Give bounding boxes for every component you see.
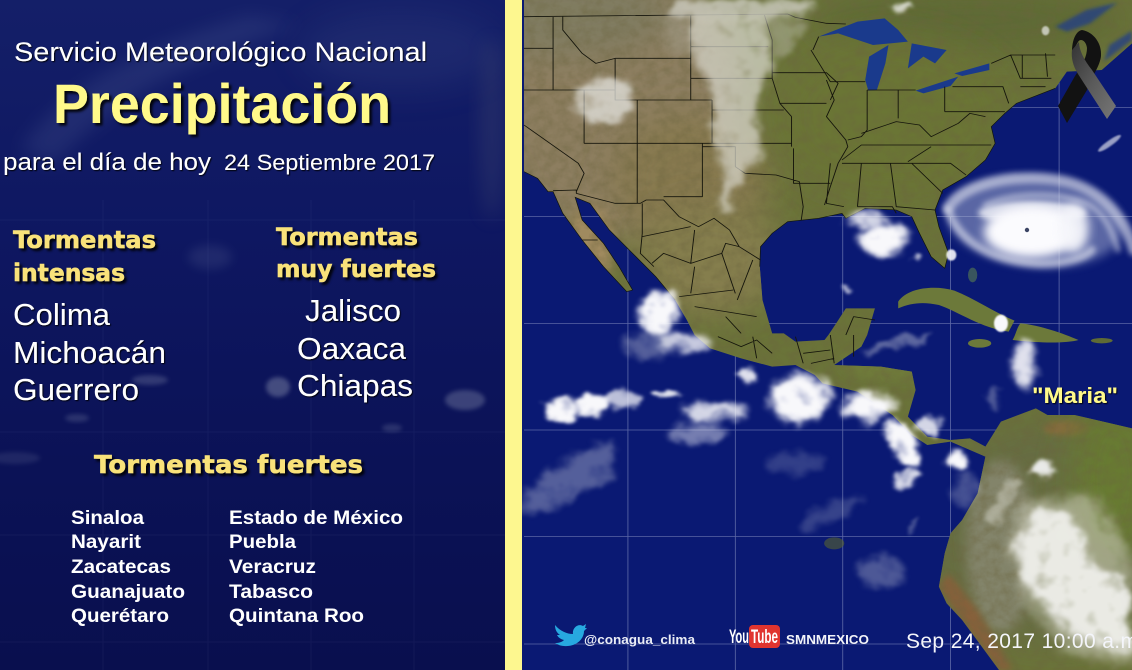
block: tormentas fuertes: Tabasco	[229, 582, 313, 603]
label: hurricane Maria: "Maria"	[1032, 383, 1118, 408]
block: tormentas muy fuertes: Chiapas	[297, 368, 413, 403]
hurricane Maria	[943, 169, 1132, 275]
icon: youtube logo	[729, 625, 780, 648]
land masses	[524, 0, 1132, 670]
block: tormentas muy fuertes: Jalisco	[305, 293, 401, 328]
block: tormentas fuertes: Nayarit	[71, 532, 142, 553]
map grid	[524, 67, 1132, 670]
twitter handle: @conagua_clima	[584, 632, 696, 647]
subtitle: today: para el día de hoy	[3, 149, 211, 176]
block: tormentas muy fuertes: Tormentas	[276, 223, 418, 251]
block: tormentas muy fuertes	[276, 223, 436, 403]
block: tormentas muy fuertes: Oaxaca	[297, 331, 407, 366]
block: tormentas intensas: Michoacán	[13, 335, 166, 370]
clouds: thin cirrus	[524, 329, 1000, 588]
icon: youtube logo: Tube	[751, 627, 778, 648]
great lakes and gulf of st lawrence	[819, 3, 1132, 93]
icon: youtube logo: You	[729, 627, 749, 648]
coastline	[524, 88, 1055, 300]
block: tormentas intensas	[13, 226, 166, 407]
block: tormentas fuertes: Quintana Roo	[229, 606, 364, 627]
block: tormentas fuertes	[71, 450, 403, 627]
timestamp: Sep 24, 2017 10:00 a.m	[906, 630, 1132, 653]
clouds: gulf, atlantic and pacific	[546, 213, 1055, 492]
subtitle: date: 24 Septiembre 2017	[224, 150, 435, 175]
block: tormentas fuertes: Guanajuato	[71, 582, 185, 603]
title: institution: Servicio Meteorológico Nacional	[14, 37, 427, 67]
cloud layer	[524, 0, 1132, 663]
block: tormentas fuertes: Sinaloa	[71, 508, 144, 529]
icon: twitter bird	[555, 624, 587, 646]
block: tormentas fuertes: Veracruz	[229, 557, 316, 578]
youtube channel: SMNMEXICO	[786, 632, 869, 647]
panel: forecast text background	[0, 0, 522, 670]
clouds: sharp small patches	[946, 26, 1123, 332]
block: tormentas intensas: Guerrero	[13, 372, 139, 407]
block: tormentas intensas: intensas	[13, 259, 125, 287]
block: tormentas fuertes: Estado de México	[229, 508, 403, 529]
block: tormentas fuertes: Tormentas fuertes	[94, 450, 363, 479]
block: tormentas intensas: Tormentas	[13, 226, 156, 254]
caribbean islands	[824, 268, 1113, 549]
block: tormentas intensas: Colima	[13, 297, 111, 332]
heading: Precipitación: Precipitación	[53, 72, 391, 135]
black mourning ribbon	[1058, 30, 1116, 123]
clouds: central US band	[573, 0, 914, 213]
state and national borders	[524, 14, 1055, 363]
block: tormentas fuertes: Querétaro	[71, 606, 169, 627]
block: tormentas fuertes: Puebla	[229, 532, 296, 553]
block: tormentas muy fuertes: muy fuertes	[276, 255, 436, 283]
satellite map	[522, 0, 1132, 670]
clouds: south america	[985, 477, 1132, 663]
block: tormentas fuertes: Zacatecas	[71, 557, 171, 578]
